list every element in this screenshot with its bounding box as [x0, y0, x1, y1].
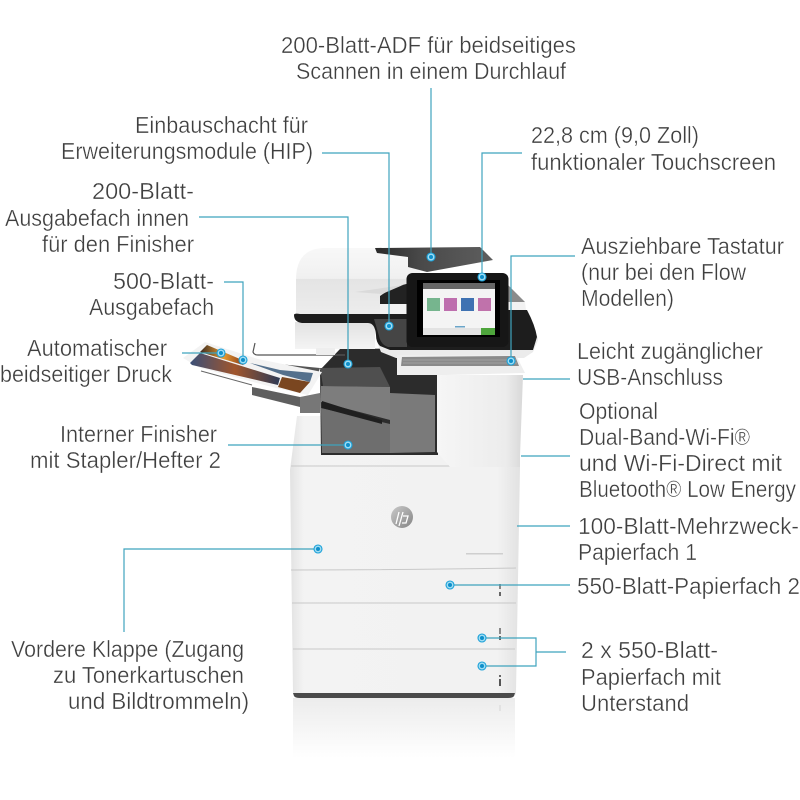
label: Wi-Fi: und Wi-Fi-Direct mit — [579, 450, 782, 476]
callout line: tray 1 — [517, 525, 570, 527]
label: 500-sheet bin: 500-Blatt- — [113, 268, 214, 294]
label: lower trays — [581, 637, 721, 716]
lower cabinet with paper trays — [290, 416, 520, 711]
label: finisher: mit Stapler/Hefter 2 — [30, 447, 221, 473]
label: finisher: Interner Finisher — [60, 421, 217, 447]
label: USB: Leicht zugänglicher — [577, 338, 763, 364]
label: touchscreen: funktionaler Touchscreen — [531, 149, 776, 175]
callout line: 500-sheet bin — [224, 282, 247, 364]
document feeder — [375, 247, 493, 272]
label: keyboard: Modellen) — [581, 285, 674, 311]
label: Wi-Fi: Dual-Band-Wi-Fi® — [579, 424, 750, 450]
label: keyboard: Ausziehbare Tastatur — [581, 233, 784, 259]
label: lower trays: 2 x 550-Blatt- — [581, 637, 718, 663]
label: HIP: Einbauschacht für — [135, 112, 308, 138]
label: lower trays: Papierfach mit — [581, 664, 721, 690]
label: touchscreen: 22,8 cm (9,0 Zoll) — [531, 122, 699, 148]
label: inner output bin — [5, 178, 194, 257]
label: USB — [577, 338, 763, 390]
callout line: Wi-Fi — [521, 455, 570, 457]
label: duplex: beidseitiger Druck — [0, 361, 172, 387]
label: HIP — [61, 112, 313, 164]
label: ADF — [281, 32, 576, 84]
callout line: keyboard — [507, 256, 575, 365]
label: USB: USB-Anschluss — [577, 364, 723, 390]
callout line: inner output bin — [199, 217, 352, 368]
label: keyboard: (nur bei den Flow — [581, 259, 747, 285]
label: ADF: Scannen in einem Durchlauf — [296, 58, 566, 84]
callout lines and markers — [124, 88, 575, 670]
scanner and control panel — [294, 248, 538, 358]
label: lower trays: Unterstand — [581, 690, 689, 716]
callout line: front door — [124, 545, 322, 632]
callout line: ADF — [427, 88, 435, 261]
label: 500-sheet bin: Ausgabefach — [89, 294, 214, 320]
hp logo — [391, 506, 413, 528]
callout line: tray 2 — [446, 581, 570, 589]
right white column — [437, 375, 523, 467]
label: tray 1: 100-Blatt-Mehrzweck- — [578, 513, 799, 539]
label: 500-sheet bin — [89, 268, 214, 320]
printer — [183, 247, 538, 758]
callout line: USB — [523, 378, 570, 380]
label: duplex: Automatischer — [27, 335, 167, 361]
touchscreen — [406, 273, 508, 347]
label: inner output bin: für den Finisher — [42, 231, 194, 257]
callout line: touchscreen — [478, 153, 522, 281]
label: tray 1 — [578, 513, 799, 565]
label: touchscreen — [531, 122, 776, 175]
label: HIP: Erweiterungsmodule (HIP) — [61, 138, 313, 164]
label: duplex — [0, 335, 172, 387]
label: Wi-Fi: Optional — [579, 398, 658, 424]
keyboard — [397, 355, 525, 375]
label: finisher — [30, 421, 221, 473]
label: front door: und Bildtrommeln) — [68, 688, 249, 714]
label: front door: zu Tonerkartuschen — [53, 662, 244, 688]
label: keyboard — [581, 233, 784, 311]
callout line: lower trays — [478, 634, 566, 670]
label: ADF: 200-Blatt-ADF für beidseitiges — [281, 32, 576, 58]
label: front door — [11, 636, 249, 714]
callout line: HIP — [322, 153, 393, 330]
label: Wi-Fi — [579, 398, 796, 502]
output trays with printed pages — [183, 342, 345, 413]
finisher — [320, 348, 438, 455]
label: tray 1: Papierfach 1 — [578, 539, 697, 565]
label: inner output bin: 200-Blatt- — [92, 178, 194, 204]
label: inner output bin: Ausgabefach innen — [5, 205, 189, 231]
label: front door: Vordere Klappe (Zugang — [11, 636, 244, 662]
callout line: finisher — [228, 441, 352, 449]
printer reflection — [293, 698, 515, 758]
callout line: duplex — [182, 349, 225, 357]
